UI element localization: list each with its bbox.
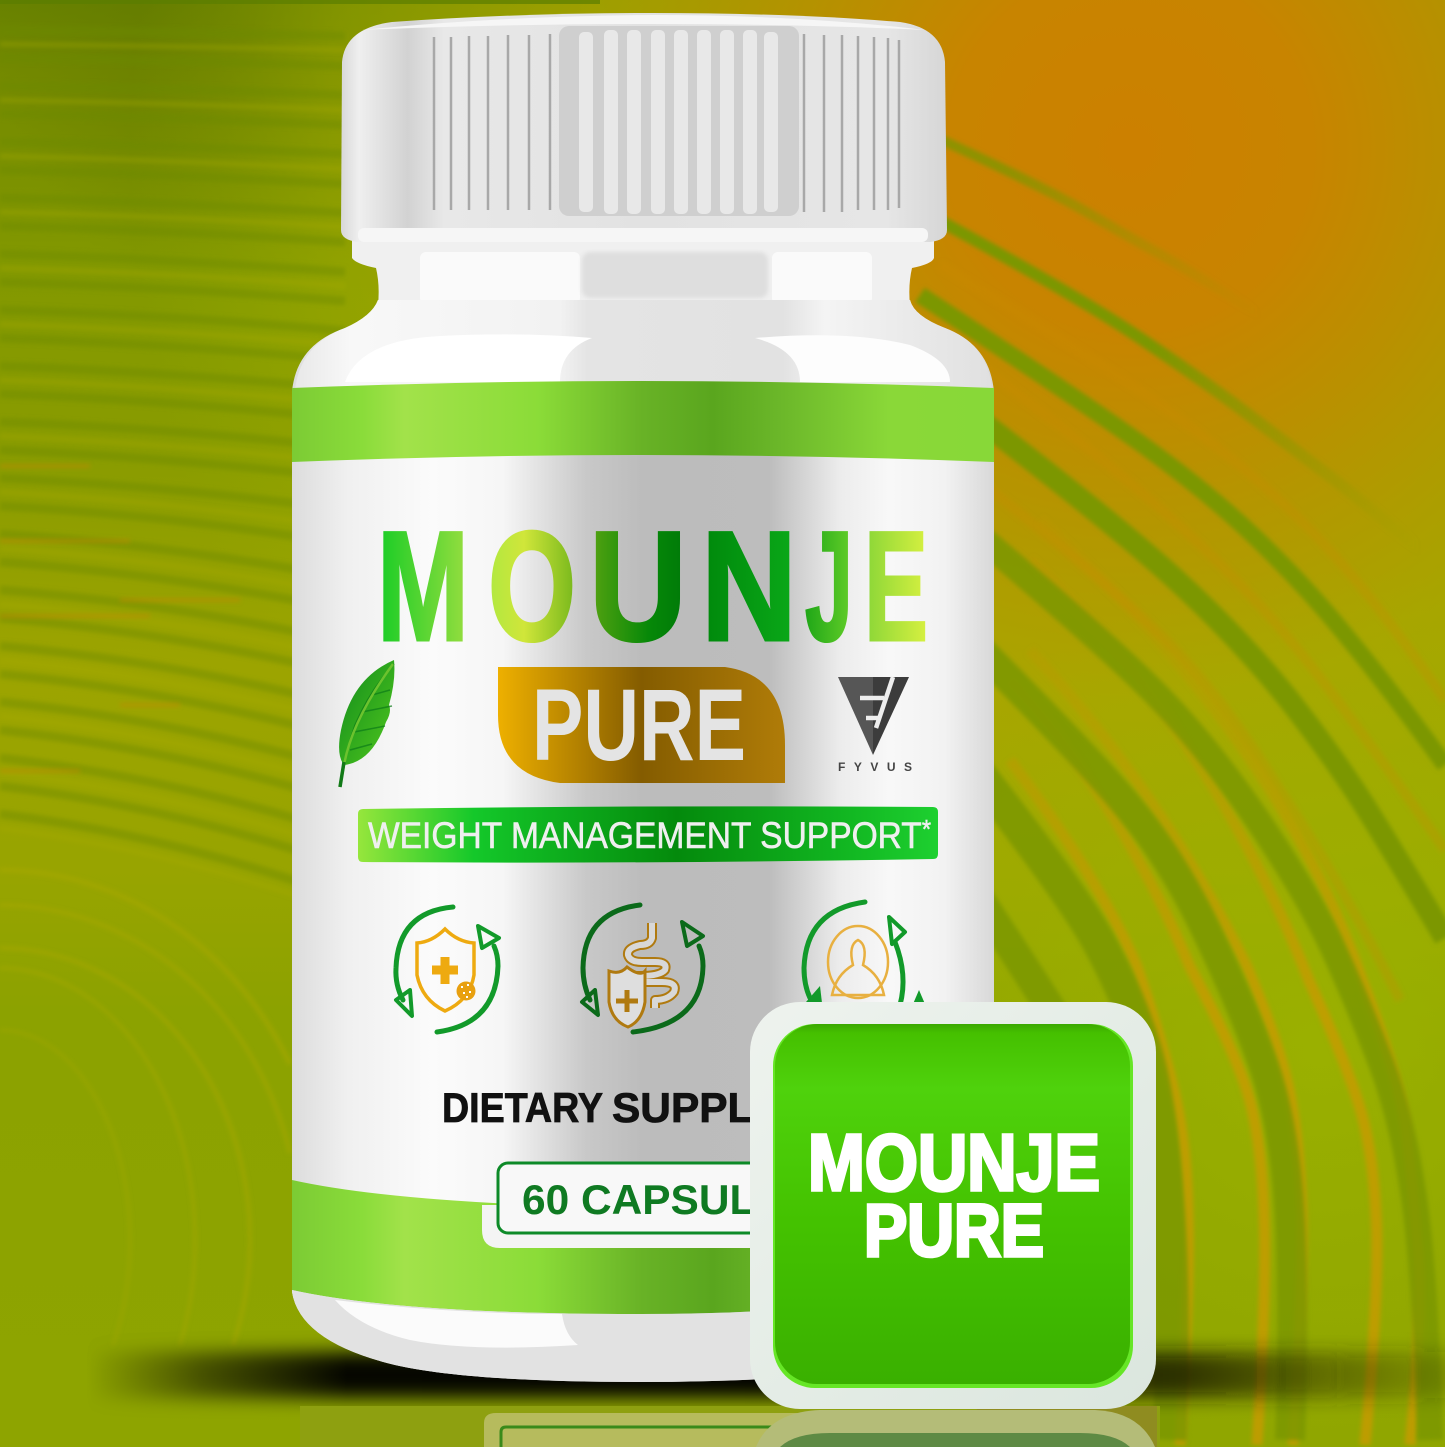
icon: digestive system <box>582 905 703 1032</box>
icon: meditation <box>804 902 925 1005</box>
brand title: MOUNJE: J <box>805 500 853 674</box>
tagline pill: WEIGHT MANAGEMENT SUPPORT <box>368 815 979 856</box>
bottle cap <box>341 13 947 242</box>
tile label: PURE <box>864 1189 1044 1272</box>
tile label: MOUNJE <box>808 1118 1100 1207</box>
icon: leaf <box>339 660 394 787</box>
logo: FYVUS: FYVUS <box>838 760 912 774</box>
right ripple bands <box>920 130 1445 1440</box>
PURE badge: PURE <box>532 668 746 782</box>
bottom of bottle <box>292 1282 994 1382</box>
dietary supplement text: DIETARY <box>442 1084 603 1131</box>
capsule count box <box>482 1163 818 1248</box>
logo: FYVUS <box>838 677 912 774</box>
grip panel <box>559 26 799 216</box>
tile label <box>808 1118 1100 1272</box>
floor shadow <box>40 1352 1445 1398</box>
right orange stripes <box>1010 520 1419 1445</box>
brand title: MOUNJE: M <box>377 500 469 674</box>
tile frame <box>750 1002 1156 1409</box>
shoulder gloss <box>345 334 592 382</box>
tagline pill <box>358 806 938 863</box>
app tile badge <box>750 1002 1156 1409</box>
left concentric arcs <box>0 870 290 1345</box>
bottom gloss <box>335 1300 578 1348</box>
floor reflection <box>300 1406 1160 1447</box>
brand title: MOUNJE: U <box>589 500 687 674</box>
brand title: MOUNJE: O <box>488 500 576 674</box>
bottle <box>292 238 994 1382</box>
dietary supplement text: SUPPLEMENT <box>612 1084 902 1131</box>
brand title: MOUNJE: N <box>701 500 797 674</box>
tile face <box>773 1024 1133 1388</box>
icon: immune shield <box>396 907 499 1032</box>
bottle neck <box>352 238 934 305</box>
tagline pill: * <box>922 814 931 844</box>
brand title: MOUNJE <box>377 500 928 674</box>
bottom green band <box>292 1180 994 1314</box>
brand title: MOUNJE: E <box>864 500 928 674</box>
top green band <box>292 381 994 462</box>
dietary supplement text <box>442 1084 902 1131</box>
capsule count box: 60 CAPSULES <box>522 1176 812 1223</box>
bottle body <box>292 300 994 1382</box>
